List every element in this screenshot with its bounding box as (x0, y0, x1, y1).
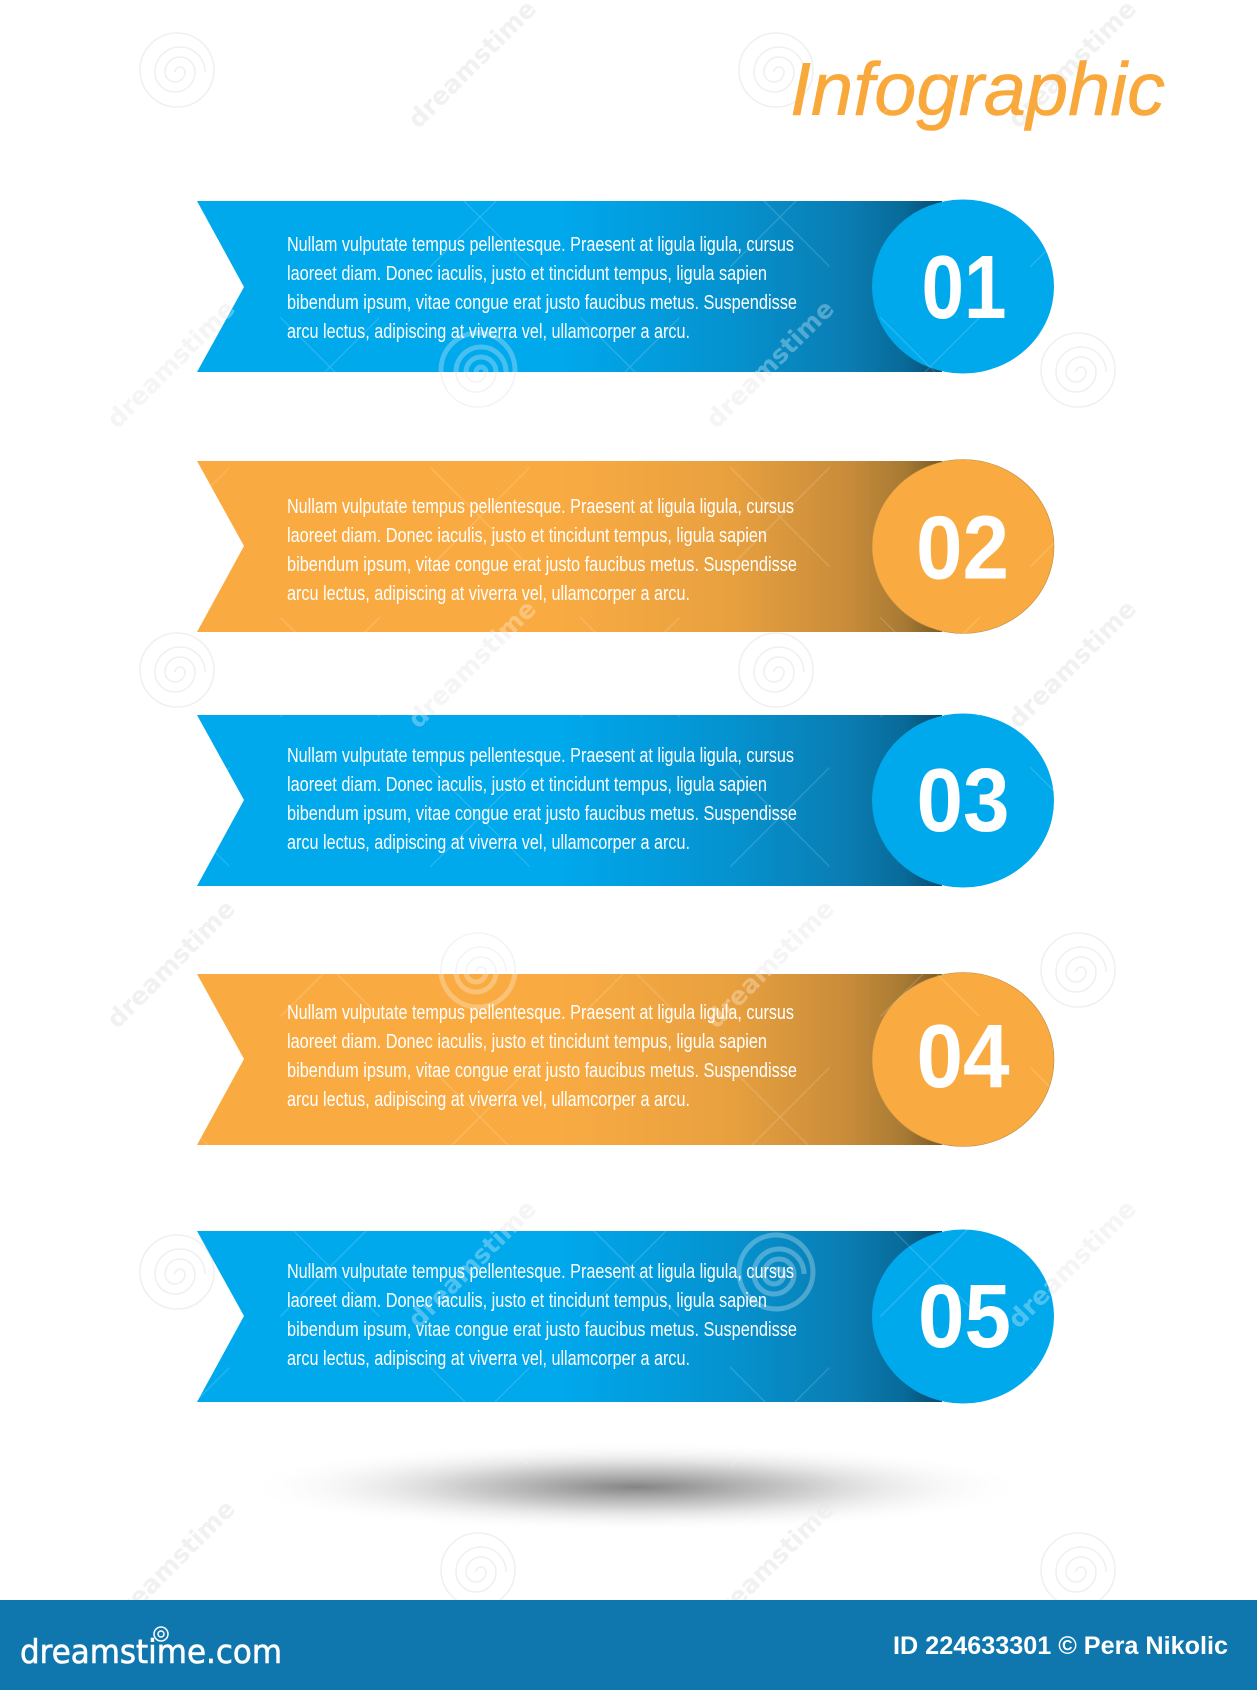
footer bar (0, 1600, 1257, 1690)
text block 04: arcu lectus, adipiscing at viverra vel, ullamcorper a arcu. (287, 1089, 690, 1111)
text block 01: bibendum ipsum, vitae congue erat justo faucibus metus. Suspendisse (287, 292, 797, 314)
ribbon shape 03 (197, 715, 942, 886)
text block 03: laoreet diam. Donec iaculis, justo et tincidunt tempus, ligula sapien (287, 774, 767, 796)
watermark overlay layer: dreamstime (402, 594, 542, 734)
ribbon shape 02 (197, 461, 942, 632)
number badge 02 (872, 460, 1054, 634)
number badge 01: 01 (922, 238, 1006, 338)
text block 02: laoreet diam. Donec iaculis, justo et tincidunt tempus, ligula sapien (287, 525, 767, 547)
text block 05: bibendum ipsum, vitae congue erat justo faucibus metus. Suspendisse (287, 1319, 797, 1341)
number badge 03: 03 (916, 751, 1010, 851)
text block 03 (287, 745, 797, 854)
ribbon 02 (197, 460, 1054, 634)
ribbon 05 (197, 1230, 1054, 1404)
watermark background layer: dreamstime (402, 594, 542, 734)
number badge 01 (872, 200, 1054, 374)
text block 01: laoreet diam. Donec iaculis, justo et tincidunt tempus, ligula sapien (287, 263, 767, 285)
ribbon shape 04 (197, 974, 942, 1145)
ribbon 01 (197, 200, 1054, 374)
icon: spiral logo (154, 1627, 168, 1641)
text block 03: arcu lectus, adipiscing at viverra vel, ullamcorper a arcu. (287, 832, 690, 854)
watermark background layer: dreamstime (700, 294, 840, 434)
text block 01 (287, 234, 797, 343)
watermark overlay layer: dreamstime (1002, 1194, 1142, 1334)
watermark background layer: dreamstime (1002, 594, 1142, 734)
title: Infographic (790, 47, 1165, 131)
watermark background layer: dreamstime (101, 1494, 241, 1634)
ribbon 04 (197, 972, 1054, 1146)
watermark background layer: dreamstime (1002, 1194, 1142, 1334)
footer credit: ID 224633301 © Pera Nikolic (893, 1632, 1228, 1660)
text block 05: laoreet diam. Donec iaculis, justo et tincidunt tempus, ligula sapien (287, 1290, 767, 1312)
text block 04: laoreet diam. Donec iaculis, justo et tincidunt tempus, ligula sapien (287, 1031, 767, 1053)
text block 05 (287, 1261, 797, 1370)
watermark overlay layer: dreamstime (700, 894, 840, 1034)
watermark background layer: dreamstime (101, 894, 241, 1034)
watermark background layer: dreamstime (700, 1494, 840, 1634)
ribbon shape 05 (197, 1231, 942, 1402)
watermark background layer: dreamstime (700, 894, 840, 1034)
text block 05: Nullam vulputate tempus pellentesque. Praesent at ligula ligula, cursus (287, 1261, 794, 1283)
text block 02: Nullam vulputate tempus pellentesque. Praesent at ligula ligula, cursus (287, 496, 794, 518)
text block 03: bibendum ipsum, vitae congue erat justo faucibus metus. Suspendisse (287, 803, 797, 825)
footer logo: dreamstime.com (20, 1632, 282, 1671)
watermark background layer: dreamstime (101, 294, 241, 434)
number badge 04: 04 (916, 1007, 1010, 1107)
watermark background layer: dreamstime (402, 1194, 542, 1334)
text block 04 (287, 1002, 797, 1111)
number badge 03 (872, 714, 1054, 888)
watermark overlay layer: dreamstime (101, 294, 241, 434)
number badge 05: 05 (918, 1267, 1011, 1367)
watermark overlay layer: dreamstime (700, 294, 840, 434)
text block 01: arcu lectus, adipiscing at viverra vel, ullamcorper a arcu. (287, 321, 690, 343)
text block 04: Nullam vulputate tempus pellentesque. Praesent at ligula ligula, cursus (287, 1002, 794, 1024)
number badge 02: 02 (916, 498, 1009, 598)
text block 02: bibendum ipsum, vitae congue erat justo faucibus metus. Suspendisse (287, 554, 797, 576)
text block 02: arcu lectus, adipiscing at viverra vel, ullamcorper a arcu. (287, 583, 690, 605)
number badge 04 (872, 972, 1054, 1146)
ground shadow (241, 1442, 1031, 1532)
ribbon shape 01 (197, 201, 942, 372)
text block 02 (287, 496, 797, 605)
text block 05: arcu lectus, adipiscing at viverra vel, ullamcorper a arcu. (287, 1348, 690, 1370)
text block 04: bibendum ipsum, vitae congue erat justo faucibus metus. Suspendisse (287, 1060, 797, 1082)
text block 01: Nullam vulputate tempus pellentesque. Praesent at ligula ligula, cursus (287, 234, 794, 256)
number badge 05 (872, 1230, 1054, 1404)
watermark overlay layer: dreamstime (402, 1194, 542, 1334)
text block 03: Nullam vulputate tempus pellentesque. Praesent at ligula ligula, cursus (287, 745, 794, 767)
ribbon 03 (197, 714, 1054, 888)
